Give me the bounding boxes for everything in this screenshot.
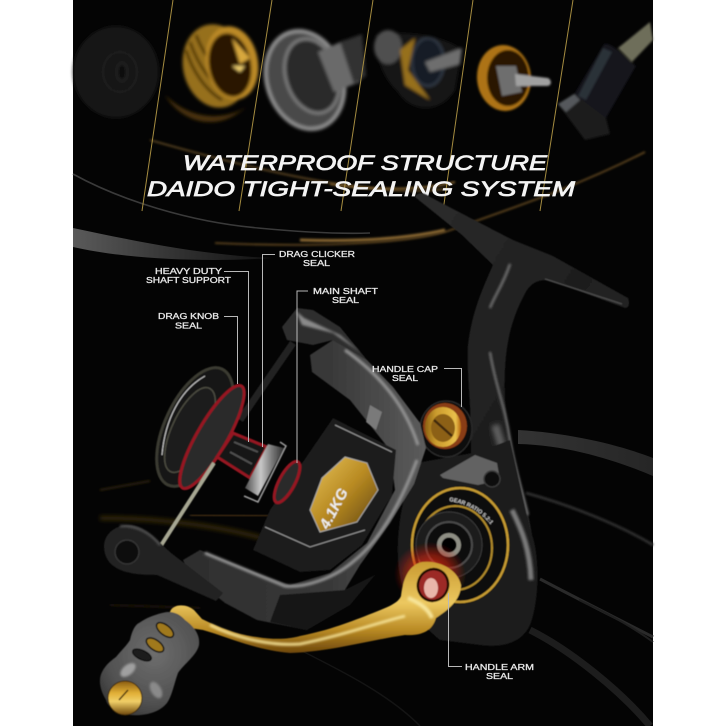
photo: drag knob <box>73 26 159 118</box>
divider 3 <box>341 0 373 211</box>
gear ratio text: GEAR RATIO 5.2:1 <box>448 496 494 526</box>
knob slot 3 <box>131 647 153 663</box>
bail arm top <box>282 308 367 360</box>
gold glow arcs <box>215 152 645 245</box>
grey swoosh band <box>73 228 272 260</box>
rotor arm <box>183 340 426 630</box>
arm collar shine <box>408 598 432 618</box>
knob lower highlight <box>147 680 165 700</box>
divider 4 <box>443 0 473 211</box>
divider 5 <box>540 0 573 211</box>
callout: handle arm seal: HANDLE ARM <box>465 663 534 672</box>
photo: black threaded bolt <box>558 22 653 140</box>
stem highlight <box>490 264 528 515</box>
callout: drag knob seal: DRAG KNOB <box>158 312 219 321</box>
rotor plate <box>253 418 396 572</box>
title line 1: WATERPROOF STRUCTURE <box>183 152 548 175</box>
lower left gold glows <box>100 518 262 538</box>
callout: handle arm seal <box>448 593 534 681</box>
thin bail arm <box>240 343 293 420</box>
reel illustration <box>100 192 629 716</box>
callout: drag knob seal <box>158 312 238 384</box>
body screw <box>484 471 500 487</box>
callout: handle cap seal <box>372 365 462 407</box>
red main shaft seal <box>269 458 305 506</box>
arm seal core <box>424 578 438 598</box>
red drag knob seal <box>170 378 254 496</box>
callout: handle cap seal: SEAL <box>392 374 419 383</box>
divider 1 <box>142 0 173 211</box>
foot shadow line <box>545 279 622 304</box>
thin grey arc <box>73 174 370 233</box>
callout: heavy duty shaft support <box>146 267 248 442</box>
shaft texture <box>230 442 258 464</box>
right side thick band <box>518 430 653 476</box>
right side thin arcs <box>526 493 653 545</box>
callout: drag clicker seal: SEAL <box>303 259 331 268</box>
photo: gold cap with bolt <box>474 43 551 113</box>
callout: main shaft seal: SEAL <box>332 296 360 305</box>
rotor lower shadow <box>270 575 375 630</box>
callout: handle arm seal: SEAL <box>486 672 514 681</box>
title <box>147 152 576 201</box>
callout: drag knob seal: SEAL <box>175 322 203 330</box>
clicker bracket <box>244 442 286 502</box>
drag knob <box>141 356 249 498</box>
divider 2 <box>239 0 272 211</box>
photo: silver bearing <box>251 18 366 142</box>
gold window <box>310 457 378 532</box>
gold diagonal dividers <box>142 0 573 211</box>
rear body housing <box>398 440 538 646</box>
photo: clicker gear <box>374 30 462 108</box>
stem wide sheen <box>495 425 515 490</box>
rotor arm highlight <box>205 350 418 586</box>
callout: drag clicker seal: DRAG CLICKER <box>279 250 355 259</box>
red shaft support <box>217 433 267 478</box>
handle knob <box>100 612 199 715</box>
callout: heavy duty shaft support: SHAFT SUPPORT <box>146 276 231 285</box>
background swooshes <box>73 140 653 726</box>
callout: main shaft seal: MAIN SHAFT <box>313 287 378 296</box>
knob slot 1 <box>154 620 176 640</box>
callout: handle cap seal: HANDLE CAP <box>372 365 438 374</box>
bail roller <box>115 540 139 564</box>
body highlight plate <box>440 455 500 485</box>
silver clicker ring <box>245 444 284 496</box>
body side highlight <box>512 510 531 580</box>
handle cap <box>420 401 472 457</box>
callout: heavy duty shaft support: HEAVY DUTY <box>155 267 223 276</box>
gear side plate <box>410 486 510 604</box>
callout: main shaft seal <box>297 287 378 463</box>
drag rating text: 4.1KG <box>316 485 352 533</box>
photo strip of sealed parts <box>73 18 653 142</box>
photo: gold threaded seal <box>165 18 264 122</box>
bail arm end <box>104 525 223 601</box>
black background panel <box>73 0 653 726</box>
knob slot 2 <box>144 635 166 655</box>
gold handle arm <box>170 562 461 653</box>
rotor window highlight <box>366 405 382 430</box>
bail wire <box>160 463 214 547</box>
red handle glow <box>394 542 466 606</box>
callout: drag clicker seal <box>262 250 355 447</box>
red highlighted seals and spool <box>141 356 305 506</box>
knob gold cap <box>108 681 142 715</box>
reel foot and stem <box>415 193 629 555</box>
arm shine <box>210 616 405 644</box>
knob highlight <box>118 660 138 680</box>
title line 2: DAIDO TIGHT-SEALING SYSTEM <box>147 178 576 201</box>
arm seal opening <box>413 565 453 605</box>
